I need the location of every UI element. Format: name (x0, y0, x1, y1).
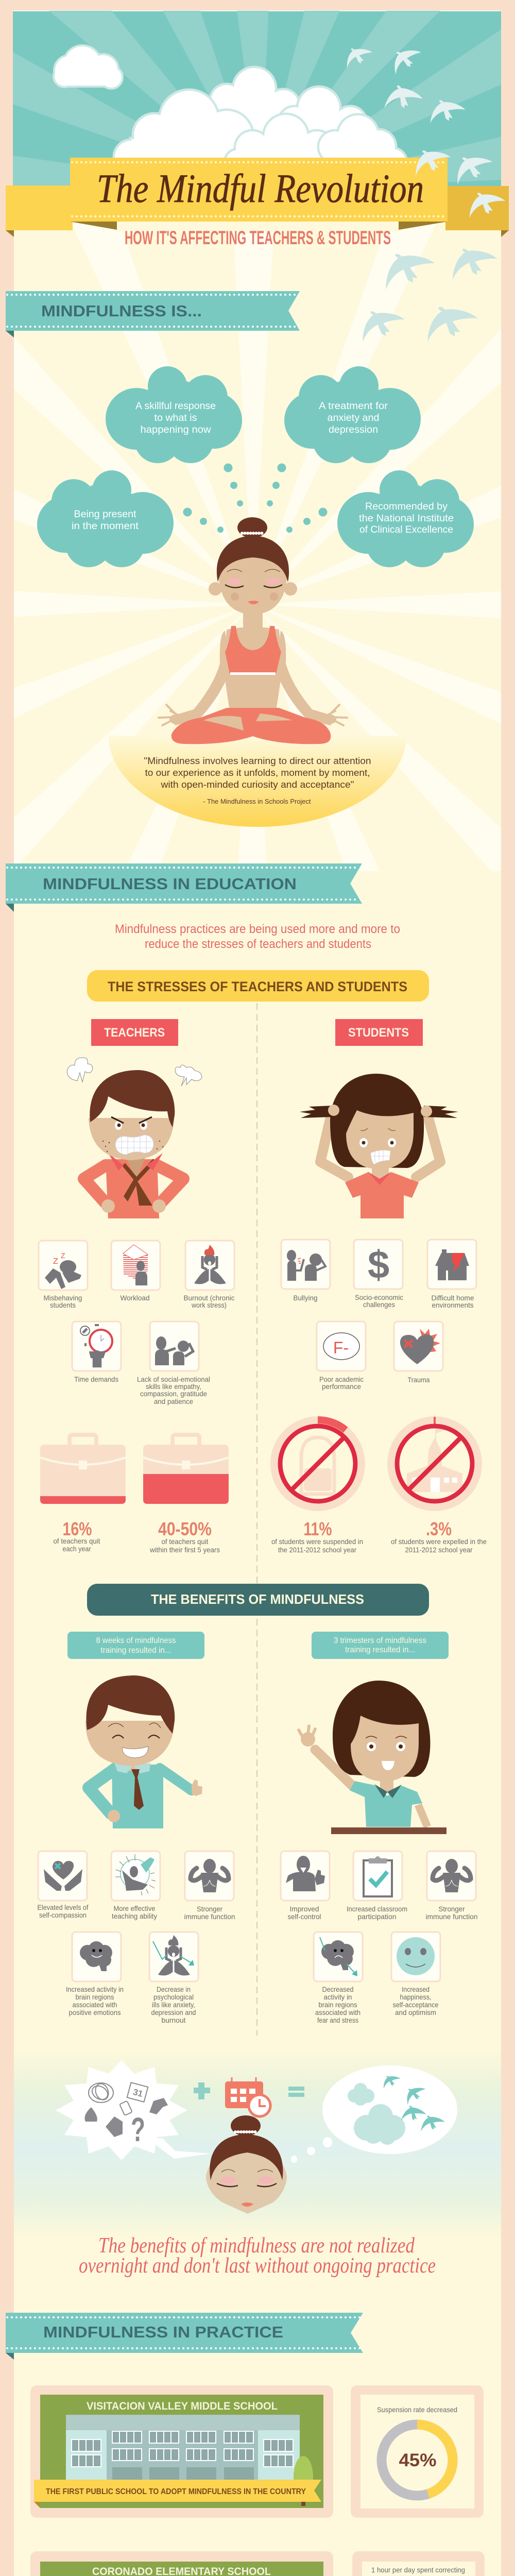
label: and optimism (395, 2008, 436, 2016)
quote: - The Mindfulness in Schools Project (203, 798, 311, 805)
label (355, 1293, 403, 1309)
banner: mindfulness in education (6, 863, 362, 912)
shirt (345, 1172, 419, 1218)
label: students (335, 1019, 423, 1046)
face details (227, 578, 242, 584)
stat: 40-50% briefcase: 40-50% (158, 1518, 212, 1539)
label: 3 trimesters: training resulted in... (345, 1646, 415, 1654)
cloud: being present (37, 470, 174, 567)
icon: calendar and clock (225, 2077, 270, 2116)
stat: 40-50% briefcase (143, 1435, 229, 1554)
label: self-control (287, 1912, 321, 1921)
heading: MINDFULNESS IN EDUCATION (43, 875, 297, 893)
label: Socio-economic (355, 1293, 403, 1301)
label (37, 1903, 89, 1919)
cloud: recommended: the National Institute (359, 513, 454, 524)
icon: poor academic (317, 1321, 366, 1371)
label: participation (357, 1912, 397, 1921)
heading: MINDFULNESS IS... (41, 302, 202, 320)
label: psychological (153, 1993, 194, 2001)
icon: brain sad (314, 1932, 363, 1981)
label: associated with (315, 2008, 360, 2016)
panel: 45% suspension rate: Suspension rate decreased (377, 2405, 457, 2414)
icon: small cloud (55, 46, 122, 88)
icon: plus (194, 2082, 210, 2099)
label (319, 1375, 364, 1391)
label (287, 1905, 321, 1921)
cloud: being present: Being present (74, 509, 136, 520)
icon: large cloud group (115, 68, 406, 176)
label: students: STUDENTS (348, 1026, 409, 1040)
ribbon (34, 2480, 321, 2508)
label: positive emotions (69, 2008, 121, 2016)
stat: .3% expelled (391, 1417, 487, 1554)
head (89, 1118, 174, 1160)
stat: 11% suspended (271, 1420, 363, 1554)
icon: immune (185, 1851, 234, 1901)
thought dots (183, 464, 328, 533)
illustration: angry teacher (67, 1058, 202, 1218)
script message: overnight and don't last without ongoing practice (79, 2254, 436, 2278)
icon: social-emotional (150, 1321, 199, 1371)
icon: teaching ability (111, 1851, 160, 1901)
label: Stronger (197, 1905, 222, 1913)
quote: to our experience as it unfolds, moment by moment, (145, 768, 370, 778)
label: Bullying (294, 1294, 317, 1302)
label: Burnout (chronic (183, 1294, 235, 1302)
script message (79, 2234, 436, 2278)
label: Increased (402, 1985, 430, 1993)
icons: student stresses (281, 1240, 476, 1391)
label: performance (322, 1382, 361, 1391)
label: Increased classroom (347, 1905, 407, 1913)
label: students (50, 1301, 76, 1309)
label: 3 trimesters: 3 trimesters of mindfulness (334, 1636, 426, 1645)
label (137, 1375, 210, 1405)
pill: stresses heading (87, 970, 429, 1002)
panel: clock stat: 1 hour per day spent correcting (371, 2566, 465, 2574)
stat: .3% expelled: of students were expelled in the (391, 1537, 487, 1546)
label: challenges (363, 1300, 395, 1309)
icons: teacher stresses (39, 1241, 235, 1405)
label: Stronger (439, 1905, 465, 1913)
ribbon: title (6, 158, 509, 237)
cloud: skillful response: A skillful response (135, 401, 216, 412)
icon: calm thought bubble (291, 2065, 457, 2163)
label: self-acceptance (392, 2001, 439, 2009)
label: compassion, gratitude (140, 1389, 207, 1398)
icon: self-compassion (38, 1851, 87, 1901)
shirt (84, 1165, 106, 1203)
label: immune function (425, 1912, 478, 1921)
label: Elevated levels of (37, 1903, 89, 1911)
tie (124, 1160, 154, 1180)
icon: misbehaving students (39, 1241, 88, 1290)
label (184, 1905, 235, 1921)
cloud: treatment: anxiety and (328, 413, 379, 423)
label: 8 weeks: training resulted in... (101, 1646, 171, 1655)
panel: clock stat (352, 2551, 485, 2576)
icon: burst of stressful thoughts: ? (131, 2110, 145, 2148)
panel: 45% suspension rate (351, 2385, 484, 2518)
banner: mindfulness in practice (6, 2313, 363, 2360)
label: environments (432, 1301, 474, 1309)
label (151, 1985, 196, 2024)
label: teachers (91, 1019, 178, 1046)
stat: 40-50% briefcase: within their first 5 years (149, 1546, 220, 1554)
icon: burnout (185, 1241, 234, 1290)
label: teaching ability (112, 1912, 157, 1920)
label: fear and stress (317, 2016, 358, 2024)
stat: .3% expelled: .3% (426, 1518, 452, 1539)
stat: 40-50% briefcase: of teachers quit (162, 1537, 209, 1546)
intro text (115, 922, 400, 951)
stat: 11% suspended: the 2011-2012 school year (278, 1546, 356, 1554)
label: 8 weeks (67, 1632, 204, 1659)
quote: with open-minded curiosity and acceptance" (160, 779, 354, 790)
icon: burst of stressful thoughts (56, 2060, 211, 2160)
label: self-compassion (39, 1911, 87, 1919)
icon: socio-economic: $ (368, 1243, 389, 1287)
face (372, 1165, 389, 1181)
cloud: skillful response (106, 366, 242, 463)
label: Increased activity in (66, 1985, 124, 1993)
pigtails (300, 1106, 332, 1118)
label: and patience (154, 1397, 193, 1405)
illustration: stressed student (300, 1074, 458, 1218)
label: happiness, (400, 1993, 432, 2001)
stat: 16% briefcase: each year (63, 1545, 91, 1553)
label (392, 1985, 439, 2016)
ribbon: THE FIRST PUBLIC SCHOOL TO ADOPT MINDFULNESS IN THE COUNTRY (46, 2487, 306, 2496)
label: 8 weeks: 8 weeks of mindfulness (96, 1636, 176, 1645)
desk (331, 1827, 447, 1834)
steam clouds (67, 1058, 202, 1086)
quote (144, 756, 371, 805)
icon: poor academic: F- (333, 1338, 349, 1357)
hair (330, 1074, 424, 1168)
pill: benefits heading: THE BENEFITS OF MINDFULNESS (151, 1591, 364, 1607)
worry icons (89, 2082, 148, 2115)
cloud: recommended (337, 470, 474, 567)
arms (320, 1113, 348, 1177)
icon: workload (111, 1241, 160, 1290)
label: associated with (72, 2001, 117, 2009)
label (183, 1294, 235, 1309)
gold semicircle (109, 736, 406, 827)
intro text: reduce the stresses of teachers and students (145, 937, 371, 951)
label (432, 1294, 474, 1309)
label: skills like empathy, (146, 1382, 201, 1391)
label (315, 1985, 360, 2024)
cloud: treatment: A treatment for (319, 401, 388, 412)
icon: misbehaving students: Z (53, 1257, 58, 1266)
icon: self-control (281, 1851, 330, 1901)
label: Lack of social-emotional (137, 1375, 210, 1383)
cloud: recommended: Recommended by (365, 501, 448, 512)
illustration: woman's head (206, 2115, 287, 2214)
label: brain regions (318, 2001, 357, 2009)
label: ills like anxiety, (152, 2001, 195, 2009)
icon: smile (391, 1932, 440, 1981)
divider: dashed centre line (256, 1003, 258, 2036)
icon: trauma (394, 1321, 443, 1371)
label (425, 1905, 478, 1921)
label: Time demands (74, 1375, 118, 1383)
illustration: meditating woman (159, 517, 347, 744)
label: Trauma (408, 1376, 430, 1384)
label: Misbehaving (43, 1294, 82, 1302)
quote: "Mindfulness involves learning to direct our attention (144, 756, 371, 766)
stat: 16% briefcase (40, 1435, 126, 1553)
illustration: happy teacher (85, 1675, 202, 1828)
label: Decrease in (157, 1985, 191, 1993)
label: activity in (323, 1993, 352, 2001)
label: Decreased (322, 1985, 353, 1993)
label: More effective (113, 1904, 156, 1912)
icon: clipboard (353, 1851, 402, 1901)
icon: decrease burnout (149, 1932, 198, 1981)
label: immune function (184, 1912, 235, 1921)
label: burnout (162, 2016, 186, 2024)
stat: 16% briefcase: of teachers quit (54, 1537, 100, 1545)
icon: misbehaving students: Z (61, 1251, 65, 1260)
stat: .3% expelled: 2011-2012 school year (405, 1546, 473, 1554)
icons: birds over cream (356, 242, 500, 342)
label: depression and (151, 2008, 196, 2016)
stat: 11% suspended: 11% (304, 1518, 332, 1539)
label (43, 1294, 82, 1309)
label: Poor academic (319, 1375, 364, 1383)
panel: Visitacion Valley school (30, 2385, 333, 2518)
icons: student benefits (281, 1851, 478, 2024)
label: Difficult home (432, 1294, 474, 1302)
label: Workload (121, 1294, 149, 1302)
banner: mindfulness is (6, 291, 300, 337)
intro text: Mindfulness practices are being used more and more to (115, 922, 400, 936)
icon: difficult home (427, 1240, 476, 1289)
pill: benefits heading (87, 1584, 429, 1616)
label (347, 1905, 407, 1921)
script message: The benefits of mindfulness are not realized (98, 2234, 415, 2258)
stat: 11% suspended: of students were suspended in (271, 1537, 363, 1546)
panel: 45% suspension rate: 45% (399, 2450, 437, 2470)
label: work stress) (191, 1301, 227, 1309)
pill: stresses heading: THE STRESSES OF TEACHERS AND STUDENTS (108, 979, 407, 994)
building (66, 2415, 313, 2506)
neck and head (243, 611, 263, 632)
torso (224, 627, 282, 711)
label: Improved (289, 1905, 319, 1913)
panel: gradient band (14, 2048, 501, 2239)
title: The Mindful Revolution (97, 166, 424, 211)
cloud: being present: in the moment (72, 521, 139, 532)
heading: MINDFULNESS IN PRACTICE (43, 2323, 283, 2341)
cloud: skillful response: to what is (154, 413, 197, 423)
heading: VISITACION VALLEY MIDDLE SCHOOL (87, 2400, 278, 2412)
cloud: skillful response: happening now (140, 425, 211, 435)
label: 3 trimesters (312, 1632, 449, 1659)
icon: equals (288, 2087, 304, 2097)
icon: burst of stressful thoughts: 31 (132, 2087, 144, 2099)
icons: birds in the sky (342, 42, 507, 218)
teeth (115, 1135, 153, 1155)
icon: immune (427, 1851, 476, 1901)
cloud: recommended: of Clinical Excellence (359, 524, 453, 535)
label (112, 1904, 157, 1920)
cloud: treatment (284, 366, 421, 463)
icons: teacher benefits (37, 1851, 235, 2024)
panel: Coronado school (30, 2551, 333, 2576)
label: brain regions (75, 1993, 114, 2001)
icon: time demands (72, 1321, 121, 1371)
icon: socio-economic (354, 1240, 403, 1289)
label (66, 1985, 124, 2016)
legs (171, 708, 331, 744)
arms (159, 631, 347, 725)
icon: brain positive (72, 1932, 121, 1981)
illustration: happy student (299, 1681, 447, 1834)
stat: 16% briefcase: 16% (63, 1518, 92, 1539)
cloud: treatment: depression (329, 425, 378, 435)
label: teachers: TEACHERS (104, 1026, 165, 1040)
icon: bullying (281, 1240, 330, 1289)
donut chart (382, 2425, 453, 2496)
